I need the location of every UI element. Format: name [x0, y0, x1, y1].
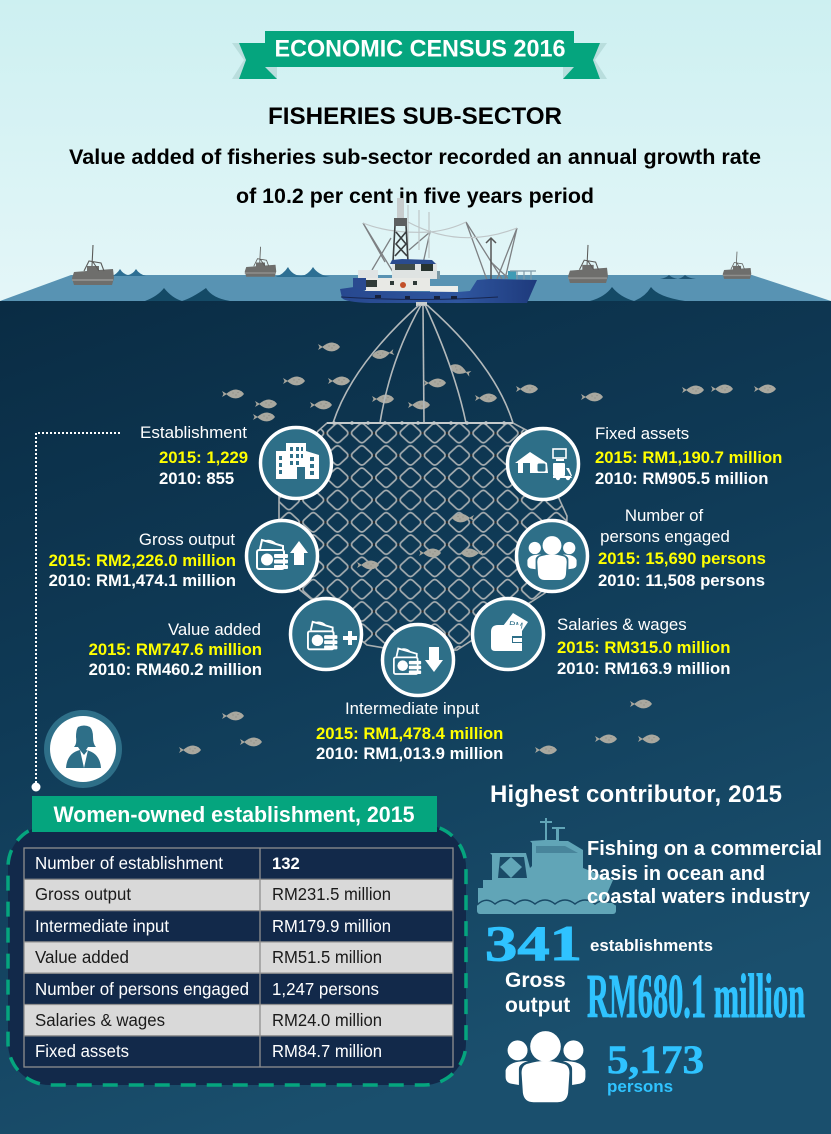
stat: 341 establishments: [485, 915, 713, 971]
label: number of persons engaged: [598, 506, 766, 590]
panel: women-owned establishment: [8, 796, 466, 1085]
heading: FISHERIES SUB-SECTOR: [268, 103, 562, 130]
label: gross output: 2015: RM2,226.0 million: [49, 551, 236, 570]
label: intermediate input: Intermediate input: [345, 699, 480, 718]
text: highest contributor industry: [587, 837, 822, 908]
label: fixed assets: [595, 424, 782, 488]
label: salaries and wages: 2015: RM315.0 million: [557, 638, 730, 657]
table: [24, 848, 453, 1067]
stat: persons: persons: [607, 1077, 673, 1096]
icon: trawler silhouette: [477, 818, 616, 914]
table: RM231.5 million: [272, 884, 391, 904]
label: intermediate input: 2015: RM1,478.4 million: [316, 724, 503, 743]
icon: gross output: [246, 520, 318, 592]
table: Intermediate input: [35, 916, 169, 936]
label: fixed assets: Fixed assets: [595, 424, 689, 443]
sea surface: [0, 275, 831, 301]
stat: persons: [506, 1031, 704, 1102]
fish inside net: [357, 514, 483, 569]
icon: number of persons engaged: [516, 520, 588, 592]
label: salaries and wages: 2010: RM163.9 million: [557, 659, 730, 678]
icon: salaries and wages wallet: RM: [508, 619, 524, 631]
label: salaries and wages: [557, 615, 730, 678]
table: 1,247 persons: [272, 979, 379, 999]
icon: fixed assets: [508, 428, 578, 500]
label: establishment: 2015: 1,229: [159, 448, 248, 467]
table: Value added: [35, 947, 129, 967]
table: Salaries & wages: [35, 1010, 165, 1030]
stat: 341 establishments: 341: [485, 915, 582, 971]
label: value added: [89, 620, 262, 679]
label: fixed assets: 2010: RM905.5 million: [595, 469, 768, 488]
icon: value added: [290, 598, 362, 670]
label: value added: 2015: RM747.6 million: [89, 640, 262, 659]
icon: woman: [44, 710, 122, 788]
icon: salaries and wages wallet: [472, 598, 544, 670]
small fishing boats: [72, 245, 751, 285]
label: fixed assets: 2015: RM1,190.7 million: [595, 448, 782, 467]
sea depth background: [0, 301, 831, 1134]
table: RM179.9 million: [272, 916, 391, 936]
near waves: [145, 287, 685, 301]
icon: intermediate input: [382, 624, 454, 696]
heading: highest contributor: Highest contributor, 2015: [490, 781, 782, 808]
icon: establishment building: [260, 428, 332, 498]
title ribbon: ECONOMIC CENSUS 2016: [274, 36, 566, 62]
title ribbon: [232, 31, 607, 79]
table: RM84.7 million: [272, 1041, 382, 1061]
label: number of persons engaged: Number of: [625, 506, 704, 525]
table: Number of establishment: [35, 853, 223, 873]
stat: 341 establishments: establishments: [590, 937, 713, 955]
label: value added: 2010: RM460.2 million: [89, 660, 262, 679]
label: establishment: [140, 423, 248, 488]
net mesh: [279, 421, 567, 654]
table: RM24.0 million: [272, 1010, 382, 1030]
label: number of persons engaged: persons engaged: [600, 527, 730, 546]
headline statement: of 10.2 per cent in five years period: [236, 184, 594, 208]
table: Number of persons engaged: [35, 979, 249, 999]
stat: gross output: Gross: [505, 969, 566, 992]
label: establishment: Establishment: [140, 423, 247, 442]
sky background: [0, 0, 831, 301]
banner: women-owned heading: Women-owned establishment, 2015: [54, 802, 414, 827]
table: Fixed assets: [35, 1041, 129, 1061]
stat: persons: 5,173: [607, 1037, 704, 1082]
label: value added: Value added: [168, 620, 261, 639]
headline statement: Value added of fisheries sub-sector recorded an annual growth rate: [69, 145, 761, 169]
label: intermediate input: 2010: RM1,013.9 million: [316, 744, 503, 763]
text: highest contributor industry: Fishing on a commercial: [587, 837, 822, 860]
text: highest contributor industry: basis in ocean and: [587, 862, 765, 885]
main fishing vessel: [340, 198, 537, 303]
table: RM51.5 million: [272, 947, 382, 967]
headline statement: [69, 145, 761, 208]
label: gross output: Gross output: [139, 530, 235, 549]
net lines: [333, 302, 513, 423]
table: 132: [272, 854, 300, 873]
fish school below net: [179, 700, 660, 754]
fish school above net: [222, 343, 776, 421]
table: Gross output: [35, 884, 131, 904]
label: number of persons engaged: 2015: 15,690 persons: [598, 549, 766, 568]
label: number of persons engaged: 2010: 11,508 persons: [598, 571, 765, 590]
label: gross output: [49, 530, 236, 590]
stat: gross output: output: [505, 994, 570, 1017]
text: highest contributor industry: coastal waters industry: [587, 885, 811, 908]
dotted connector: [32, 433, 120, 792]
label: gross output: 2010: RM1,474.1 million: [49, 571, 236, 590]
label: establishment: 2010: 855: [159, 469, 234, 488]
stat: gross output: [505, 963, 805, 1031]
label: salaries and wages: Salaries & wages: [557, 615, 687, 634]
distant waves: [112, 267, 696, 279]
label: intermediate input: [316, 699, 503, 763]
banner: women-owned heading: [32, 796, 437, 832]
